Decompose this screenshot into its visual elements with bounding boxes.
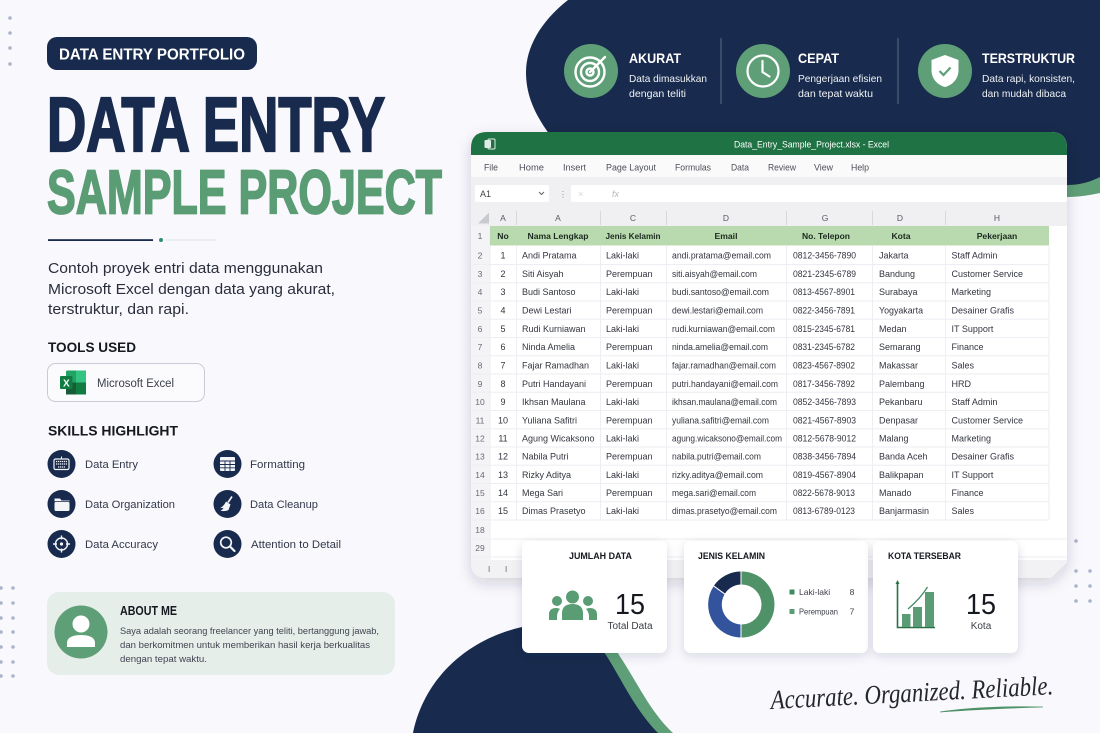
- table data rows: 0821-4567-8903: [793, 416, 856, 426]
- table data rows: Dewi Lestari: [522, 306, 572, 316]
- table header row: Email: [715, 231, 737, 241]
- table data rows: 0852-3456-7893: [793, 397, 856, 407]
- skill: formatting: Formatting: [250, 459, 305, 471]
- skill: data cleanup: Data Cleanup: [250, 499, 318, 511]
- feature: akurat: AKURAT: [629, 50, 681, 66]
- table header row: No. Telepon: [802, 231, 850, 241]
- skill: data organization: Data Organization: [85, 499, 175, 511]
- table data rows: 0813-4567-8901: [793, 287, 855, 297]
- donut legend: 7: [850, 606, 855, 616]
- table header row: Nama Lengkap: [528, 231, 588, 241]
- table data rows: budi.santoso@email.com: [672, 287, 769, 297]
- menu bar: Help: [851, 162, 869, 174]
- spreadsheet row gutter: 13: [475, 452, 485, 462]
- table data rows: Balikpapan: [879, 470, 924, 480]
- table data rows: Laki-laki: [606, 506, 639, 516]
- table data rows: Rudi Kurniawan: [522, 324, 586, 334]
- table data rows: 0838-3456-7894: [793, 452, 856, 462]
- table data rows: 12: [498, 452, 508, 462]
- table data rows: 0815-2345-6781: [793, 324, 855, 334]
- spreadsheet row gutter: 16: [475, 506, 485, 516]
- spreadsheet row gutter: 6: [478, 324, 483, 334]
- stat card: jenis kelamin: [684, 541, 868, 653]
- panel: about me: dengan tepat waktu.: [120, 654, 207, 665]
- table header row: Kota: [891, 231, 911, 241]
- table data rows: 7: [500, 360, 506, 370]
- table data rows: 13: [498, 470, 508, 480]
- table data rows: Laki-laki: [606, 397, 639, 407]
- menu bar: View: [814, 162, 833, 174]
- skill: attention to detail: Attention to Detail: [251, 539, 341, 551]
- table data rows: Desainer Grafis: [952, 452, 1015, 462]
- table data rows: andi.pratama@email.com: [672, 250, 771, 260]
- badge: data entry portfolio: [47, 37, 257, 70]
- badge: data entry portfolio: DATA ENTRY PORTFOLIO: [59, 46, 245, 64]
- menu bar: Insert: [563, 162, 586, 174]
- feature: terstruktur: Data rapi, konsisten,: [982, 73, 1075, 85]
- icon: excel logo: [60, 370, 86, 394]
- table data rows: Staff Admin: [952, 397, 997, 407]
- heading: tools used: TOOLS USED: [48, 340, 136, 355]
- menu bar: Data: [731, 162, 750, 174]
- table data rows: 6: [500, 342, 506, 352]
- table header row: Jenis Kelamin: [606, 231, 660, 241]
- table data rows: Perempuan: [606, 269, 653, 279]
- table data rows: Fajar Ramadhan: [522, 360, 589, 370]
- feature: cepat: Pengerjaan efisien: [798, 73, 882, 85]
- feature: terstruktur: dan mudah dibaca: [982, 88, 1066, 100]
- decorative dots: right: [1074, 539, 1092, 603]
- table data rows: 0822-5678-9013: [793, 488, 855, 498]
- spreadsheet row gutter: 5: [478, 306, 483, 316]
- stat card: jumlah data: 15: [615, 589, 645, 621]
- panel: about me: ABOUT ME: [120, 604, 177, 618]
- table data rows: 0812-3456-7890: [793, 250, 856, 260]
- panel: about me: [47, 592, 395, 675]
- sheet footer bar: I: [505, 565, 507, 574]
- table data rows: Nabila Putri: [522, 452, 569, 462]
- spreadsheet row gutter: 2: [478, 250, 483, 260]
- table data rows: Laki-laki: [606, 324, 639, 334]
- spreadsheet column headers: A: [555, 213, 561, 223]
- spreadsheet row gutter: 29: [475, 543, 485, 553]
- table data rows: Budi Santoso: [522, 287, 576, 297]
- feature: cepat: dan tepat waktu: [798, 88, 873, 100]
- intro paragraph: [48, 260, 335, 318]
- table data rows: Makassar: [879, 360, 918, 370]
- icon: people group: [549, 590, 597, 620]
- table data rows: IT Support: [952, 470, 994, 480]
- intro paragraph: Microsoft Excel dengan data yang akurat,: [48, 281, 335, 298]
- background shape: bottom navy blob: [413, 625, 673, 733]
- table data rows: Laki-laki: [606, 470, 639, 480]
- table data rows: 1: [500, 250, 506, 260]
- table data rows: Customer Service: [952, 269, 1023, 279]
- icon: excel mini logo: [484, 139, 495, 149]
- stat card: kota tersebar: Kota: [971, 621, 992, 632]
- table data rows: Manado: [879, 488, 912, 498]
- table data rows: Ninda Amelia: [522, 342, 575, 352]
- table data rows: Dimas Prasetyo: [522, 506, 586, 516]
- sheet footer bar: [471, 560, 1067, 578]
- table data rows: 0823-4567-8902: [793, 360, 855, 370]
- table data rows: 5: [500, 324, 506, 334]
- donut legend: [790, 587, 855, 616]
- table data rows: Jakarta: [879, 250, 909, 260]
- spreadsheet row gutter: [471, 226, 490, 560]
- spreadsheet row gutter: 3: [478, 269, 483, 279]
- sheet footer bar: I: [488, 565, 490, 574]
- stat card: jenis kelamin: JENIS KELAMIN: [698, 551, 765, 562]
- table data rows: 0817-3456-7892: [793, 379, 855, 389]
- spreadsheet column headers: D: [897, 213, 903, 223]
- table data rows: 0821-2345-6789: [793, 269, 856, 279]
- decorative dots: top left: [8, 16, 12, 66]
- spreadsheet column headers: A: [500, 213, 506, 223]
- icon: shield check: [932, 55, 958, 87]
- feature: terstruktur: TERSTRUKTUR: [982, 50, 1075, 66]
- table data rows: 0819-4567-8904: [793, 470, 856, 480]
- menu bar: File: [484, 162, 498, 174]
- icon: profile avatar: [54, 606, 108, 658]
- table data rows: 0813-6789-0123: [793, 506, 855, 516]
- table grid: [471, 226, 1067, 560]
- table data rows: Perempuan: [606, 342, 653, 352]
- spreadsheet row gutter: 18: [475, 525, 485, 535]
- skill: data organization: [48, 490, 175, 518]
- table data rows: Palembang: [879, 379, 925, 389]
- skill: data cleanup: [214, 490, 318, 518]
- table data rows: 3: [500, 287, 506, 297]
- table data rows: 10: [498, 416, 508, 426]
- title: [47, 82, 442, 228]
- panel: about me: dan berkomitmen untuk memberikan hasil kerja berkualitas: [120, 640, 370, 651]
- table header row: No: [497, 231, 509, 241]
- icon: growth chart: [896, 580, 935, 628]
- feature: cepat: [736, 44, 882, 100]
- table data rows: Medan: [879, 324, 907, 334]
- table data rows: ikhsan.maulana@email.com: [672, 397, 777, 407]
- intro paragraph: terstruktur, dan rapi.: [48, 301, 189, 318]
- skill: data entry: Data Entry: [85, 459, 139, 471]
- table data rows: Laki-laki: [606, 360, 639, 370]
- feature: cepat: CEPAT: [798, 50, 839, 66]
- table data rows: siti.aisyah@email.com: [672, 269, 757, 279]
- spreadsheet row gutter: 4: [478, 287, 483, 297]
- spreadsheet row gutter: 8: [478, 360, 483, 370]
- stat card: jumlah data: Total Data: [607, 621, 653, 632]
- table data rows: 0822-3456-7891: [793, 306, 855, 316]
- table data rows: Perempuan: [606, 488, 653, 498]
- title: DATA ENTRY: [47, 82, 385, 168]
- spreadsheet row gutter: 9: [478, 379, 483, 389]
- spreadsheet row gutter: 12: [475, 434, 485, 444]
- donut legend: Perempuan: [799, 606, 838, 616]
- table data rows: [498, 250, 1023, 516]
- menu bar: Page Layout: [606, 162, 656, 174]
- menu bar: Formulas: [675, 162, 711, 174]
- donut legend: Laki-laki: [799, 587, 830, 597]
- table data rows: HRD: [952, 379, 971, 389]
- table data rows: Yuliana Safitri: [522, 416, 577, 426]
- icon: target: [576, 57, 605, 86]
- feature: akurat: [564, 44, 707, 100]
- table data rows: putri.handayani@email.com: [672, 379, 778, 389]
- spreadsheet column headers: H: [994, 213, 1000, 223]
- table data rows: Denpasar: [879, 416, 918, 426]
- table data rows: Siti Aisyah: [522, 269, 564, 279]
- table data rows: Finance: [952, 342, 984, 352]
- table data rows: 11: [498, 434, 508, 444]
- spreadsheet column headers: D: [723, 213, 729, 223]
- formula bar: A1: [480, 189, 491, 199]
- window title bar: [471, 132, 1067, 155]
- stat card: jumlah data: [522, 541, 667, 653]
- spreadsheet row gutter: 15: [475, 488, 485, 498]
- title: SAMPLE PROJECT: [47, 158, 442, 228]
- table data rows: rudi.kurniawan@email.com: [672, 324, 775, 334]
- stat card: jumlah data: JUMLAH DATA: [569, 551, 632, 562]
- icon: clock: [748, 56, 778, 86]
- table data rows: fajar.ramadhan@email.com: [672, 360, 776, 370]
- spreadsheet row gutter: 14: [475, 470, 485, 480]
- table data rows: Semarang: [879, 342, 921, 352]
- table data rows: yuliana.safitri@email.com: [672, 416, 769, 426]
- table data rows: ninda.amelia@email.com: [672, 342, 768, 352]
- table data rows: Perempuan: [606, 416, 653, 426]
- spreadsheet row gutter: 7: [478, 342, 483, 352]
- table data rows: Sales: [952, 506, 975, 516]
- tool card: microsoft excel: Microsoft Excel: [97, 378, 174, 390]
- table data rows: Laki-laki: [606, 250, 639, 260]
- table header row: [490, 226, 1049, 246]
- table data rows: rizky.aditya@email.com: [672, 470, 763, 480]
- table data rows: Putri Handayani: [522, 379, 586, 389]
- table data rows: Rizky Aditya: [522, 470, 571, 480]
- window title bar: Data_Entry_Sample_Project.xlsx - Excel: [734, 140, 889, 150]
- skill: attention to detail: [214, 530, 341, 558]
- table data rows: agung.wicaksono@email.com: [672, 434, 782, 444]
- table data rows: Laki-laki: [606, 434, 639, 444]
- tool card: microsoft excel: [48, 364, 204, 402]
- table data rows: Ikhsan Maulana: [522, 397, 586, 407]
- spreadsheet row gutter: 1: [478, 231, 483, 241]
- donut legend: 8: [850, 587, 855, 597]
- table data rows: Surabaya: [879, 287, 918, 297]
- tagline: Accurate. Organized. Reliable.: [768, 670, 1054, 715]
- table data rows: Bandung: [879, 269, 915, 279]
- formula bar: ⋮: [559, 190, 567, 199]
- heading: skills highlight: SKILLS HIGHLIGHT: [48, 424, 179, 438]
- background shape: top right navy blob: [526, 0, 1100, 197]
- stat card: kota tersebar: 15: [966, 589, 996, 621]
- table data rows: Marketing: [952, 287, 991, 297]
- icon: excel logo: X: [63, 378, 70, 390]
- table data rows: Perempuan: [606, 452, 653, 462]
- spreadsheet column headers: G: [822, 213, 828, 223]
- table data rows: Staff Admin: [952, 250, 997, 260]
- table data rows: Marketing: [952, 434, 991, 444]
- spreadsheet column headers: C: [630, 213, 636, 223]
- menu bar: Review: [768, 162, 796, 174]
- skill: data entry: [48, 450, 139, 478]
- table header row: Pekerjaan: [977, 231, 1017, 241]
- table data rows: 0831-2345-6782: [793, 342, 855, 352]
- donut chart: [708, 572, 775, 638]
- spreadsheet row gutter: 11: [476, 416, 485, 426]
- table data rows: Malang: [879, 434, 909, 444]
- skill: formatting: [214, 450, 305, 478]
- decorative dots: lower left: [0, 586, 15, 678]
- panel: about me: Saya adalah seorang freelancer yang teliti, bertanggung jawab,: [120, 626, 379, 637]
- table data rows: Laki-laki: [606, 287, 639, 297]
- feature: akurat: Data dimasukkan: [629, 73, 707, 85]
- menu bar: [484, 164, 869, 172]
- formula bar: ×: [578, 189, 583, 199]
- table data rows: Desainer Grafis: [952, 306, 1015, 316]
- stat card: kota tersebar: [873, 541, 1018, 653]
- intro paragraph: Contoh proyek entri data menggunakan: [48, 260, 323, 277]
- table data rows: Banjarmasin: [879, 506, 929, 516]
- table data rows: Perempuan: [606, 379, 653, 389]
- table data rows: 2: [500, 269, 506, 279]
- table data rows: Pekanbaru: [879, 397, 923, 407]
- formula bar: [471, 177, 1067, 226]
- table data rows: 4: [500, 306, 506, 316]
- table data rows: mega.sari@email.com: [672, 488, 756, 498]
- title divider: [48, 238, 216, 242]
- spreadsheet column headers: [478, 211, 1000, 225]
- table data rows: Perempuan: [606, 306, 653, 316]
- table data rows: Andi Pratama: [522, 250, 577, 260]
- formula bar: fx: [612, 189, 620, 199]
- table data rows: Banda Aceh: [879, 452, 928, 462]
- excel window: [471, 132, 1067, 578]
- table data rows: Yogyakarta: [879, 306, 923, 316]
- menu bar: Home: [519, 162, 544, 174]
- feature: akurat: dengan teliti: [629, 88, 686, 100]
- table data rows: 15: [498, 506, 508, 516]
- table data rows: Sales: [952, 360, 975, 370]
- table data rows: dewi.lestari@email.com: [672, 306, 763, 316]
- table data rows: 8: [500, 379, 506, 389]
- table data rows: Customer Service: [952, 416, 1023, 426]
- table data rows: dimas.prasetyo@email.com: [672, 506, 777, 516]
- feature: terstruktur: [918, 44, 1075, 100]
- table data rows: Agung Wicaksono: [522, 434, 595, 444]
- spreadsheet row gutter: 10: [475, 397, 485, 407]
- table data rows: Finance: [952, 488, 984, 498]
- table data rows: 14: [498, 488, 508, 498]
- table data rows: 0812-5678-9012: [793, 434, 856, 444]
- table data rows: Mega Sari: [522, 488, 563, 498]
- table data rows: IT Support: [952, 324, 994, 334]
- stat card: kota tersebar: KOTA TERSEBAR: [888, 551, 961, 562]
- table data rows: 9: [500, 397, 506, 407]
- skill: data accuracy: [48, 530, 159, 558]
- table data rows: nabila.putri@email.com: [672, 452, 761, 462]
- skill: data accuracy: Data Accuracy: [85, 539, 159, 551]
